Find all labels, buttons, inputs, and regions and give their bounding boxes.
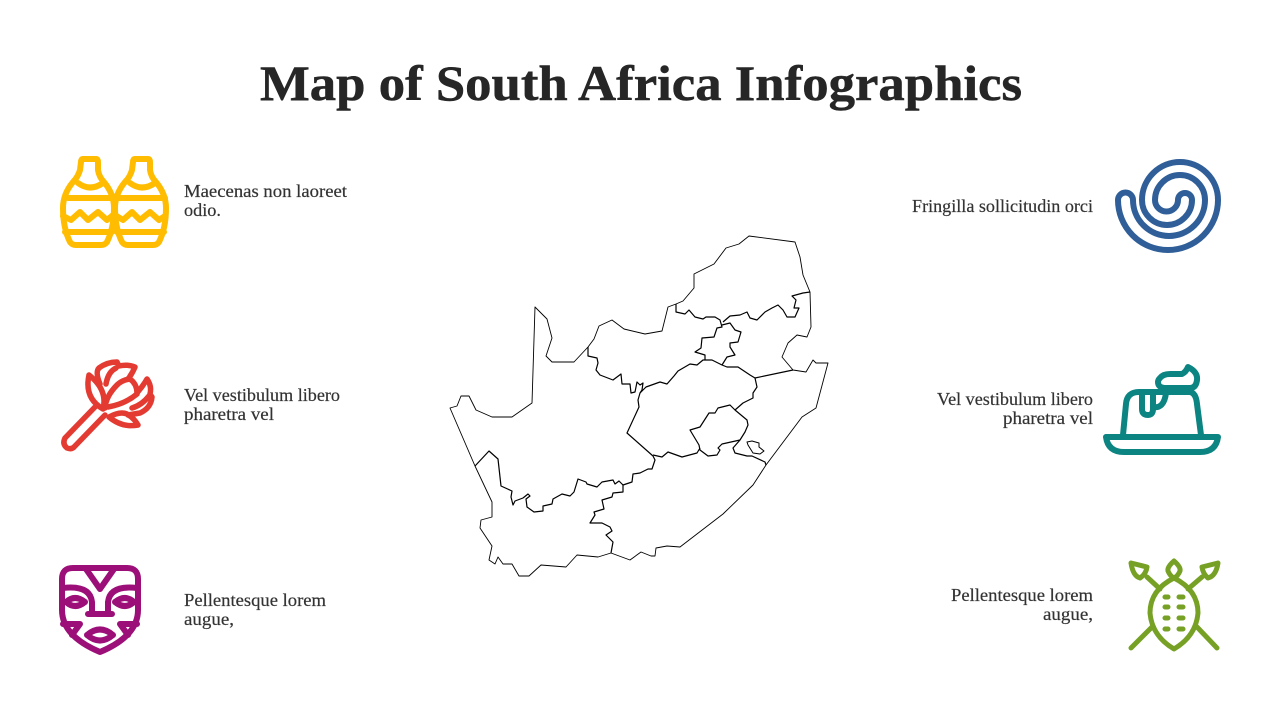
text: bottom right xyxy=(951,585,1093,624)
text: middle left: pharetra vel xyxy=(184,404,274,424)
text: middle left: Vel vestibulum libero xyxy=(184,385,340,405)
text: middle right: Vel vestibulum libero xyxy=(937,389,1093,409)
icon: spiral xyxy=(1118,162,1218,250)
title: Map of South Africa Infographics xyxy=(260,55,1022,111)
text: top left: Maecenas non laoreet xyxy=(184,181,347,201)
text: middle right xyxy=(937,389,1093,428)
text: bottom left xyxy=(184,590,326,629)
icon: flower torch xyxy=(64,362,152,449)
text: top right: Fringilla sollicitudin orci xyxy=(912,196,1093,216)
text: bottom left: augue, xyxy=(184,609,234,629)
text: top left: odio. xyxy=(184,200,221,220)
text: bottom right: augue, xyxy=(1043,604,1093,624)
text: bottom left: Pellentesque lorem xyxy=(184,590,326,610)
text: middle right: pharetra vel xyxy=(1003,408,1093,428)
icon: pudding on plate xyxy=(1106,367,1218,452)
map of South Africa xyxy=(450,236,828,576)
provincial borders xyxy=(475,292,810,553)
icon: twin vases xyxy=(63,159,166,245)
icon: shield and spears xyxy=(1131,561,1218,649)
icon: tribal mask xyxy=(62,568,138,652)
country outline xyxy=(450,236,828,576)
text: middle left xyxy=(184,385,340,424)
text: top left xyxy=(184,181,347,220)
text: bottom right: Pellentesque lorem xyxy=(951,585,1093,605)
